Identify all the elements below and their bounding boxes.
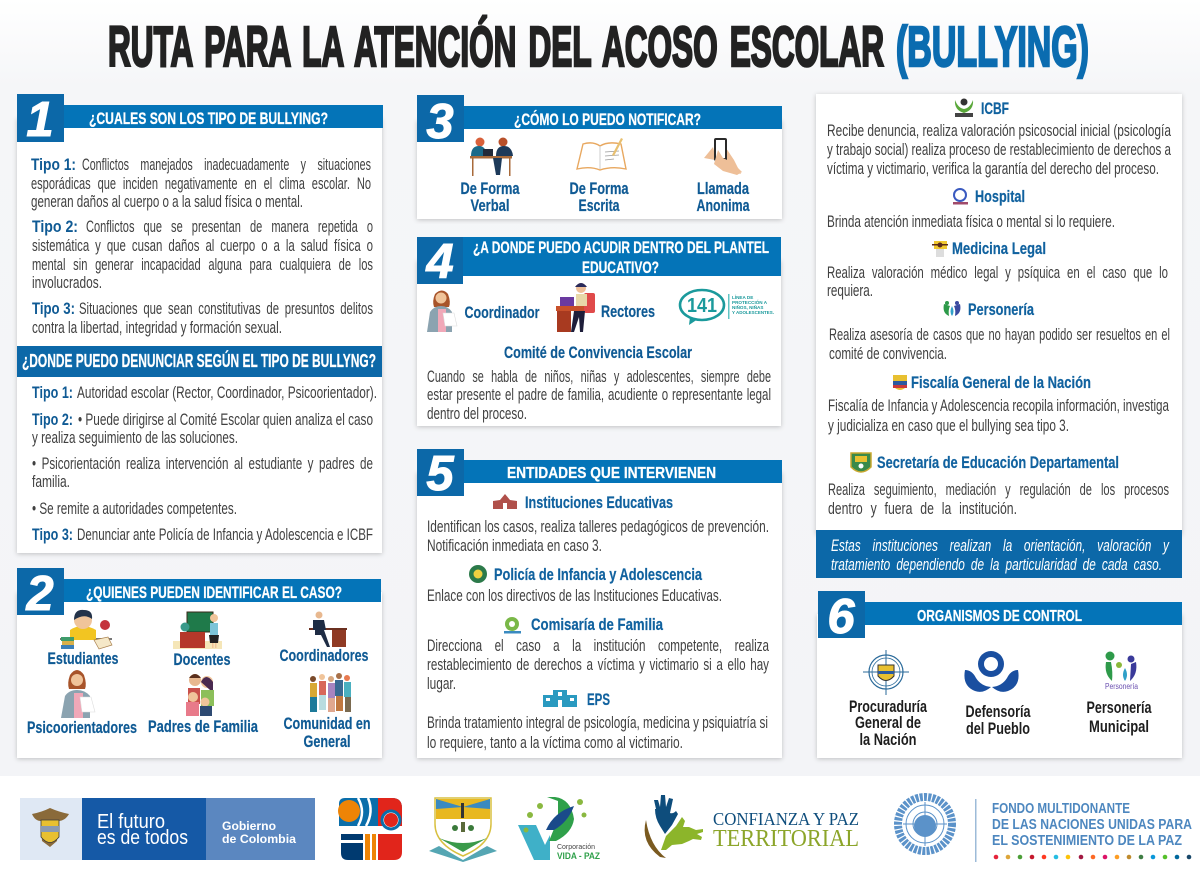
- text: tipo 3: contra la libertad, integridad y formación sexual.: [32, 319, 282, 337]
- text: donde denunciar: • Puede dirigirse al Comité Escolar quien analiza el caso: [78, 411, 373, 429]
- item: medicina legal: [827, 239, 1168, 300]
- item: procuraduria: la Nación: [860, 730, 916, 749]
- logo: confianza y paz territorial: [645, 795, 859, 858]
- header 4: [417, 235, 781, 289]
- item: docentes: [173, 612, 230, 669]
- header 5: [417, 447, 782, 501]
- header 6: ORGANISMOS DE CONTROL: [917, 608, 1082, 625]
- item: instituciones educativas: Identifican los casos, realiza talleres pedagógicos de prevención.: [427, 518, 769, 536]
- item: icbf: [827, 98, 1172, 178]
- item: procuraduria: General de: [855, 713, 921, 732]
- item: personeria: [829, 300, 1170, 363]
- heading: comite: Comité de Convivencia Escolar: [504, 343, 692, 362]
- item: de forma escrita: De Forma: [570, 179, 629, 198]
- text: donde denunciar: • Psicorientación realiza intervención al estudiante y padres de: [32, 455, 373, 473]
- header 3: 3: [426, 95, 454, 149]
- panel 2: quienes identifican: [17, 567, 382, 758]
- text: donde denunciar: Tipo 1:: [32, 384, 73, 402]
- text: tipo 3: Tipo 3:: [32, 300, 75, 318]
- item: medicina legal: Medicina Legal: [952, 239, 1046, 258]
- item: personeria municipal: [1086, 652, 1152, 736]
- header 2: ¿QUIENES PUEDEN IDENTIFICAR EL CASO?: [86, 583, 342, 602]
- item: psicoorientadores: [27, 670, 137, 737]
- item: policia: Policía de Infancia y Adolescencia: [494, 565, 702, 584]
- logo: linea 141: [680, 290, 774, 325]
- text: tipo 2: mental sin generar incapacidad alguna para cualquiera de los: [32, 256, 373, 274]
- item: defensoria: [964, 651, 1031, 738]
- logo: linea 141: PROTECCIÓN A: [732, 298, 768, 305]
- text: tipo 2: involucrados.: [32, 274, 102, 292]
- item: defensoria: Defensoría: [966, 702, 1031, 721]
- item: coordinadores: [280, 612, 368, 665]
- item: comisaria: [427, 615, 770, 693]
- item: comisaria: Comisaría de Familia: [531, 615, 663, 634]
- item: procuraduria: Procuraduría: [849, 697, 927, 716]
- panel 3: como notificar: [417, 95, 782, 219]
- item: hospital: [827, 187, 1115, 231]
- item: eps: EPS: [587, 690, 610, 709]
- item: rectores: [556, 283, 655, 332]
- item: medicina legal: requiera.: [827, 282, 873, 300]
- item: icbf: ICBF: [981, 99, 1009, 118]
- item: comisaria: restablecimiento de derechos a víctima y victimario si a ello hay: [427, 656, 770, 674]
- header 4: 4: [425, 235, 454, 289]
- item: coordinador: [427, 290, 540, 332]
- header 4: ¿A DONDE PUEDO ACUDIR DENTRO DEL PLANTEL: [473, 238, 769, 257]
- item: instituciones educativas: Instituciones Educativas: [525, 493, 673, 512]
- subheading bar: [17, 346, 382, 377]
- item: defensoria: del Pueblo: [966, 719, 1030, 738]
- logo: corporacion vida paz: Corporación: [557, 842, 595, 851]
- header 3: ¿CÓMO LO PUEDO NOTIFICAR?: [514, 110, 701, 129]
- item: instituciones educativas: [427, 493, 769, 555]
- item: policia: [427, 565, 722, 605]
- header 5: ENTIDADES QUE INTERVIENEN: [507, 465, 716, 482]
- item: personeria: comité de convivencia.: [829, 345, 947, 363]
- item: personeria municipal: Personería: [1105, 682, 1138, 691]
- item: llamada anonima: Anonima: [696, 196, 750, 215]
- text: donde denunciar: Tipo 2:: [32, 411, 73, 429]
- item: secretaria: [828, 453, 1169, 518]
- logo: corporacion vida paz: VIDA - PAZ: [557, 851, 600, 861]
- item: coordinador: Coordinador: [464, 303, 540, 322]
- item: padres de familia: Padres de Familia: [148, 717, 258, 736]
- item: comunidad en general: General: [304, 732, 350, 751]
- text: tipo 1: generan daños al cuerpo o a la salud física o mental.: [31, 193, 303, 211]
- text: donde denunciar: Autoridad escolar (Rector, Coordinador, Psicoorientador).: [77, 384, 377, 402]
- item: comisaria: Direcciona el caso a la institución competente, realiza: [427, 637, 770, 655]
- logo: gobierno de colombia: de Colombia: [222, 832, 296, 846]
- item: fiscalia: y judicializa en caso que el bullying sea tipo 3.: [828, 417, 1069, 435]
- item: rectores: Rectores: [601, 302, 655, 321]
- logo: gobierno de colombia: [20, 798, 315, 860]
- panel: entidades continuacion: [816, 94, 1182, 578]
- logo: corporacion vida paz: [518, 797, 600, 861]
- text: tipo 1: Tipo 1:: [31, 156, 76, 174]
- panel 4: donde acudir: [417, 235, 781, 426]
- item: eps: Brinda tratamiento integral de psicología, medicina y psiquiatría si: [427, 714, 768, 732]
- item: policia: Enlace con los directivos de las Instituciones Educativas.: [427, 587, 722, 605]
- header 1: 1: [26, 93, 54, 147]
- item: docentes: Docentes: [174, 650, 230, 669]
- item: comunidad en general: Comunidad en: [284, 714, 370, 733]
- item: eps: [427, 690, 768, 752]
- logo: naciones unidas: [898, 797, 952, 851]
- panel 1: tipos de bullying: [17, 93, 383, 553]
- panel 6: organismos de control: [817, 590, 1182, 758]
- text: comite: [427, 368, 771, 423]
- text: tipo 1: [31, 156, 371, 211]
- item: psicoorientadores: Psicoorientadores: [27, 718, 137, 737]
- logo: linea 141: LÍNEA DE: [732, 293, 753, 300]
- logo: linea 141: NIÑOS, NIÑAS: [732, 304, 763, 310]
- logo: linea 141: Y ADOLESCENTES.: [732, 310, 774, 315]
- logo: confianza y paz territorial: TERRITORIAL: [713, 826, 859, 852]
- text: tipo 2: Conflictos que se presentan de manera repetida o: [86, 218, 373, 236]
- logo: gobierno de colombia: El futuro: [97, 811, 165, 833]
- logo: confianza y paz territorial: CONFIANZA Y PAZ: [713, 809, 859, 829]
- item: fiscalia: [828, 373, 1170, 435]
- item: llamada anonima: Llamada: [697, 179, 749, 198]
- header 6: [818, 590, 1182, 644]
- text: donde denunciar: Tipo 3:: [32, 526, 73, 544]
- header 5: 5: [426, 447, 454, 501]
- text: tipo 3: Situaciones que sean constitutivas de presuntos delitos: [79, 300, 373, 318]
- panel 5: entidades: [417, 447, 782, 758]
- text: comite: dentro del proceso.: [427, 405, 527, 423]
- logo: escudo: [429, 798, 497, 862]
- header 6: 6: [827, 590, 855, 644]
- divider: [975, 799, 976, 862]
- item: secretaria: dentro y fuera de la institución.: [828, 500, 1017, 518]
- item: hospital: Hospital: [975, 187, 1025, 206]
- item: de forma verbal: [460, 138, 520, 215]
- text: donde denunciar: [32, 384, 377, 544]
- item: fiscalia: Fiscalía General de la Nación: [911, 373, 1091, 392]
- header 4: EDUCATIVO?: [582, 258, 659, 277]
- logo: circulos y rayas: [338, 798, 402, 860]
- item: instituciones educativas: Notificación inmediata en caso 3.: [427, 537, 602, 555]
- item: de forma verbal: Verbal: [470, 196, 510, 215]
- text: donde denunciar: familia.: [32, 473, 70, 491]
- text: fondo multidonante: FONDO MULTIDONANTE: [992, 801, 1130, 817]
- header 3: [417, 95, 782, 149]
- item: personeria municipal: Personería: [1086, 698, 1152, 717]
- item: estudiantes: [48, 610, 118, 668]
- text: comite: estar presente el padre de familia, acudiente o representante legal: [427, 386, 771, 404]
- item: de forma escrita: Escrita: [578, 196, 620, 215]
- text: tipo 2: sistemática y que cusan daños al cuerpo o a la salud física o: [32, 237, 373, 255]
- text: fondo multidonante: [992, 801, 1192, 849]
- item: estudiantes: Estudiantes: [48, 649, 118, 668]
- text: comite: Cuando se habla de niños, niñas y adolescentes, siempre debe: [427, 368, 771, 386]
- header 2: 2: [25, 567, 54, 621]
- text: tipo 1: esporádicas que inciden negativamente en el clima escolar. No: [31, 175, 371, 193]
- item: personeria: Personería: [968, 300, 1034, 319]
- subheading bar: ¿DONDE PUEDO DENUNCIAR SEGÚN EL TIPO DE BULLYNG?: [22, 350, 376, 371]
- text: donde denunciar: y realiza seguimiento de las soluciones.: [32, 429, 238, 447]
- item: padres de familia: [148, 674, 258, 736]
- text: tipo 3: [32, 300, 373, 337]
- text: tipo 2: Tipo 2:: [32, 218, 78, 236]
- logo: linea 141: 141: [687, 295, 717, 317]
- item: comunidad en general: [284, 673, 370, 751]
- text: tipo 1: Conflictos manejados inadecuadamente y situaciones: [82, 156, 371, 174]
- item: de forma escrita: [570, 138, 629, 215]
- text: tipo 2: [32, 218, 373, 292]
- text: donde denunciar: • Se remite a autoridades competentes.: [32, 500, 237, 518]
- header 2: [17, 567, 381, 621]
- item: coordinadores: Coordinadores: [280, 646, 368, 665]
- logo: gobierno de colombia: es de todos: [97, 827, 188, 849]
- item: personeria municipal: Municipal: [1089, 717, 1149, 736]
- text: donde denunciar: Denunciar ante Policía de Infancia y Adolescencia e ICBF: [77, 526, 373, 544]
- item: secretaria: Secretaría de Educación Departamental: [877, 453, 1119, 472]
- header 1: [17, 93, 383, 147]
- item: procuraduria: [849, 650, 927, 749]
- item: eps: lo requiere, tanto a la víctima como al victimario.: [427, 734, 683, 752]
- logo: gobierno de colombia: Gobierno: [222, 819, 276, 833]
- header 1: ¿CUALES SON LOS TIPO DE BULLYING?: [89, 109, 328, 128]
- callout: instituciones: [816, 530, 1182, 578]
- sdg dots: [994, 855, 1191, 859]
- item: de forma verbal: De Forma: [460, 179, 520, 198]
- item: comisaria: lugar.: [427, 675, 456, 693]
- item: llamada anonima: [696, 138, 750, 215]
